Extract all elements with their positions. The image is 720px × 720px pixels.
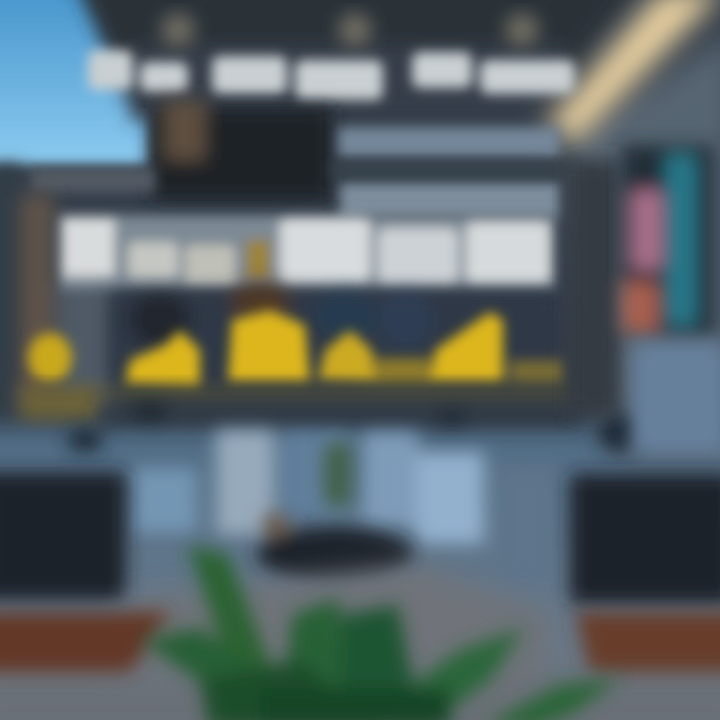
lower right wall bbox=[632, 342, 720, 454]
ceiling bbox=[70, 0, 650, 120]
grey floor bbox=[0, 565, 720, 720]
foreground plant bbox=[140, 545, 622, 720]
wooden floor right bbox=[575, 612, 720, 672]
ceiling spotlights bbox=[161, 13, 539, 47]
main heading panel (illegible, blurred) bbox=[60, 215, 555, 290]
top heading (illegible, blurred) bbox=[88, 50, 575, 100]
sky window bbox=[0, 0, 150, 165]
left sofa bbox=[0, 472, 126, 600]
glowing ceiling light strip bbox=[545, 0, 720, 145]
right wall bbox=[570, 30, 720, 460]
coffee table bbox=[257, 442, 413, 583]
left window frame bbox=[0, 165, 113, 415]
wall art panel bbox=[622, 145, 714, 335]
console table bbox=[67, 402, 642, 452]
olive shelf under chart bbox=[20, 385, 575, 420]
grey band upper right of screen bbox=[338, 127, 560, 218]
dark chart backdrop bbox=[110, 282, 560, 387]
dark wall block behind heading bbox=[150, 100, 332, 200]
horizontal frame beam bbox=[30, 162, 570, 192]
bright floor reflections bbox=[132, 430, 555, 582]
right dark column bbox=[568, 160, 620, 415]
wooden floor left bbox=[0, 612, 170, 672]
yellow chart shapes bbox=[28, 310, 565, 388]
right sofa bbox=[570, 474, 720, 604]
